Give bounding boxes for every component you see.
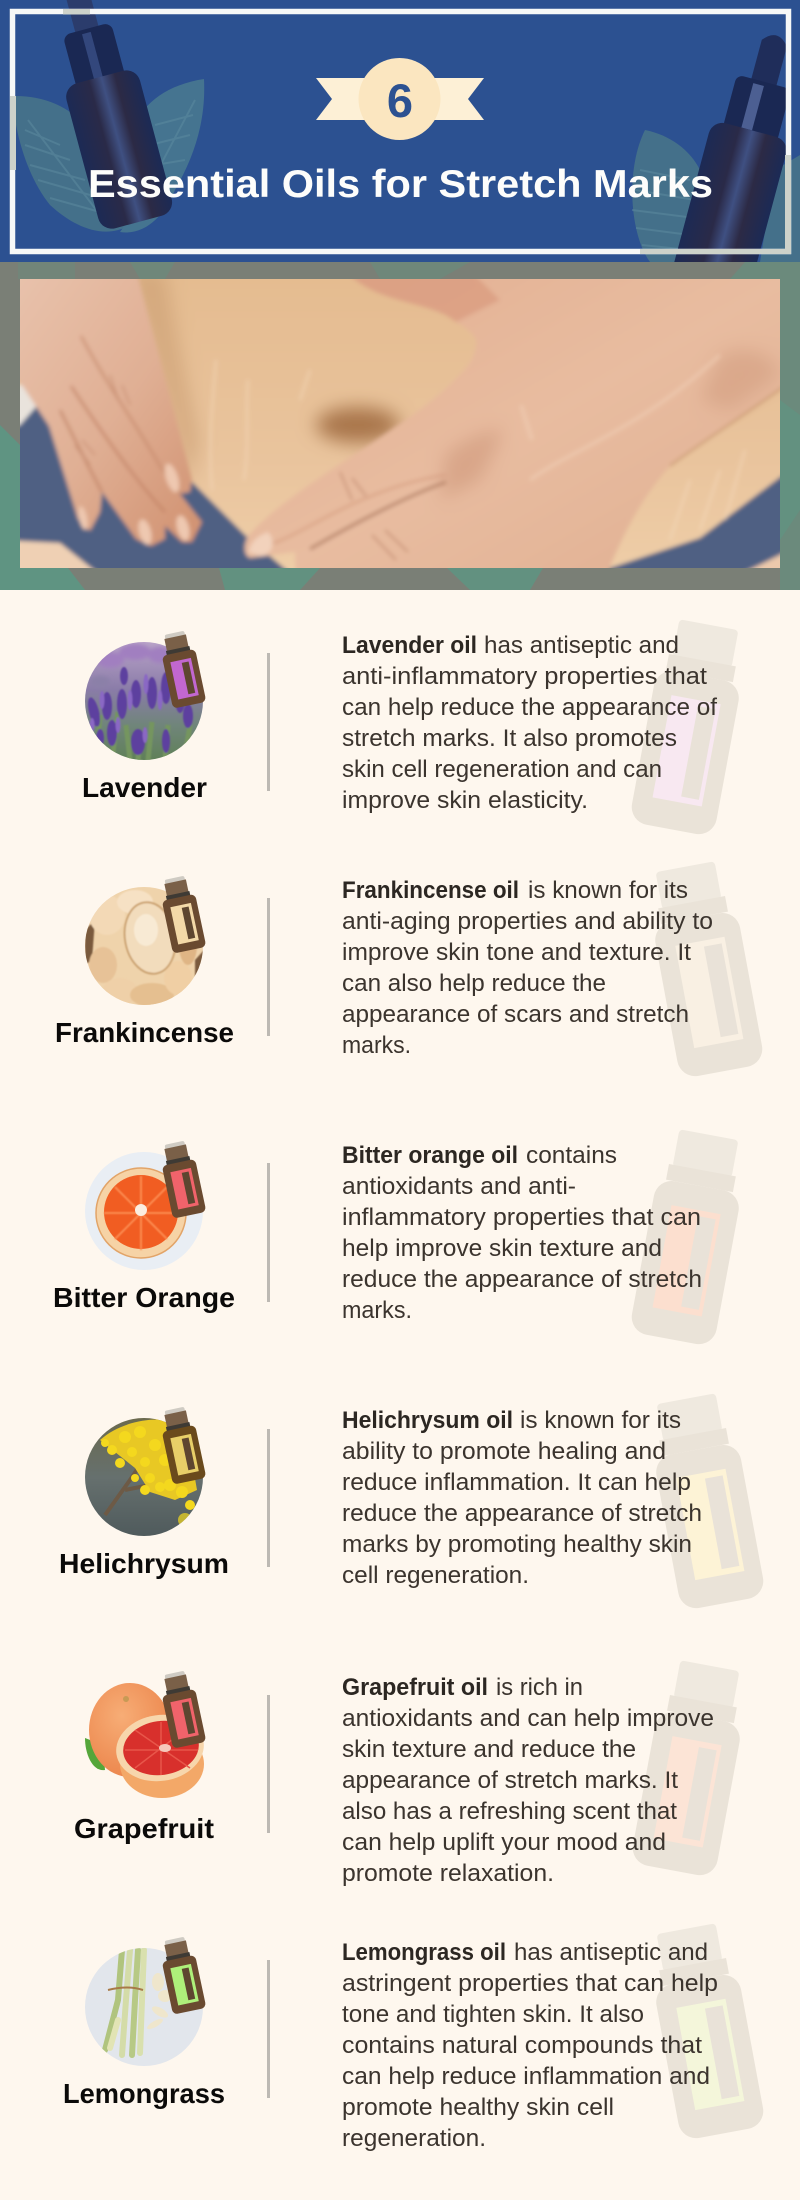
description: Lavender: anti-inflammatory properties that bbox=[342, 663, 707, 690]
leaf patches in the band bbox=[0, 262, 800, 590]
description: Frankincense: improve skin tone and texture. It bbox=[342, 939, 691, 966]
divider bbox=[267, 1695, 270, 1833]
watermark bottle: grapefruit bbox=[630, 1658, 752, 1878]
panel: blue header banner bbox=[0, 0, 800, 262]
watermark bottle: bitter orange bbox=[629, 1127, 751, 1347]
white patch beside left hand bbox=[20, 382, 38, 429]
divider bbox=[267, 1960, 270, 2098]
watermark bottle: lemongrass bbox=[644, 1921, 766, 2141]
description: Bitter Orange: help improve skin texture and bbox=[342, 1235, 662, 1262]
panel: photo band bbox=[0, 260, 800, 590]
description: Bitter Orange: inflammatory properties that can bbox=[342, 1204, 701, 1231]
description: Lavender: can help reduce the appearance of bbox=[342, 694, 717, 721]
description: Grapefruit: antioxidants and can help improve bbox=[342, 1705, 714, 1732]
label: Helichrysum: Helichrysum bbox=[59, 1548, 229, 1579]
description: Grapefruit: also has a refreshing scent that bbox=[342, 1798, 677, 1825]
skin bottom left bbox=[20, 537, 98, 568]
description: Frankincense: is known for its bbox=[528, 877, 688, 904]
description: Frankincense bbox=[342, 877, 713, 1059]
divider bbox=[267, 1429, 270, 1567]
watermark bottle: frankincense bbox=[643, 859, 765, 1079]
belly skin bbox=[20, 279, 780, 568]
navel shadow bbox=[316, 407, 400, 443]
label: Lavender: Lavender bbox=[82, 772, 207, 803]
description: Helichrysum: reduce inflammation. It can help bbox=[342, 1469, 691, 1496]
row: Grapefruit bbox=[74, 1658, 752, 1887]
description: Lavender: skin cell regeneration and can bbox=[342, 756, 662, 783]
description: Bitter Orange: reduce the appearance of stretch bbox=[342, 1266, 702, 1293]
description: Lemongrass: contains natural compounds that bbox=[342, 2032, 702, 2059]
thumb and knuckle tone bbox=[354, 279, 498, 322]
description: Grapefruit: skin texture and reduce the bbox=[342, 1736, 636, 1763]
left hand bbox=[20, 279, 205, 549]
divider bbox=[267, 1163, 270, 1302]
row: Lavender bbox=[82, 617, 751, 837]
description: Bitter Orange: marks. bbox=[342, 1297, 412, 1324]
row: Lemongrass bbox=[63, 1921, 766, 2152]
white frame bbox=[12, 12, 788, 252]
description: Grapefruit: can help uplift your mood and bbox=[342, 1829, 666, 1856]
description: Lemongrass: can help reduce inflammation and bbox=[342, 2063, 710, 2090]
icon: grapefruit oil bottle bbox=[158, 1669, 206, 1749]
description: Lavender: stretch marks. It also promotes bbox=[342, 725, 677, 752]
description: Frankincense: can also help reduce the bbox=[342, 970, 606, 997]
clothing left bbox=[20, 405, 288, 568]
description: Helichrysum bbox=[342, 1407, 702, 1589]
stretch marks bbox=[210, 362, 728, 520]
description: Grapefruit: Grapefruit oil bbox=[342, 1674, 488, 1701]
icon: lemongrass oil bottle bbox=[158, 1935, 206, 2015]
description: Grapefruit bbox=[342, 1674, 714, 1887]
photo: hands on stretch-marked belly bbox=[20, 279, 780, 568]
icon: left leaves bbox=[12, 79, 204, 232]
icon: right leaves bbox=[632, 130, 800, 262]
description: Helichrysum: reduce the appearance of stretch bbox=[342, 1500, 702, 1527]
description: Lemongrass: promote healthy skin cell bbox=[342, 2094, 614, 2121]
label: Bitter Orange: Bitter Orange bbox=[53, 1282, 235, 1313]
description: Lavender: improve skin elasticity. bbox=[342, 787, 588, 814]
description: Helichrysum: cell regeneration. bbox=[342, 1562, 529, 1589]
photo: helichrysum flowers bbox=[85, 1418, 204, 1537]
description: Lavender: Lavender oil bbox=[342, 632, 477, 659]
photo: lavender field bbox=[85, 642, 204, 761]
description: Helichrysum: marks by promoting healthy skin bbox=[342, 1531, 692, 1558]
row: Frankincense bbox=[55, 859, 765, 1079]
row: Helichrysum bbox=[59, 1391, 766, 1611]
label: Lemongrass: Lemongrass bbox=[63, 2078, 225, 2109]
icon: right dropper bottle bbox=[674, 35, 786, 262]
icon: frankincense oil bottle bbox=[158, 874, 206, 954]
description: Bitter Orange bbox=[342, 1142, 702, 1324]
tendons bbox=[521, 355, 720, 480]
description: Lemongrass bbox=[342, 1939, 718, 2152]
description: Helichrysum: is known for its bbox=[520, 1407, 681, 1434]
description: Bitter Orange: Bitter orange oil bbox=[342, 1142, 518, 1169]
description: Lemongrass: Lemongrass oil bbox=[342, 1939, 506, 1966]
icon: helichrysum oil bottle bbox=[158, 1405, 206, 1485]
shadow by left hand bbox=[140, 279, 202, 472]
description: Grapefruit: promote relaxation. bbox=[342, 1860, 554, 1887]
label: Grapefruit: Grapefruit bbox=[74, 1813, 214, 1844]
divider bbox=[267, 898, 270, 1036]
description: Lemongrass: has antiseptic and bbox=[514, 1939, 708, 1966]
description: Helichrysum: Helichrysum oil bbox=[342, 1407, 513, 1434]
description: Frankincense: appearance of scars and stretch bbox=[342, 1001, 689, 1028]
photo: lemongrass stalks bbox=[85, 1948, 204, 2067]
description: Bitter Orange: antioxidants and anti- bbox=[342, 1173, 576, 1200]
description: Lavender bbox=[342, 632, 717, 814]
photo: bitter orange slice bbox=[85, 1152, 203, 1270]
description: Grapefruit: is rich in bbox=[496, 1674, 583, 1701]
watermark bottle: lavender bbox=[629, 617, 751, 837]
ribbon badge with number 6: 6 bbox=[387, 74, 413, 127]
description: Helichrysum: ability to promote healing and bbox=[342, 1438, 666, 1465]
title: Essential Oils for Stretch Marks bbox=[88, 163, 713, 206]
divider bbox=[267, 653, 270, 791]
clothing right bbox=[607, 474, 780, 568]
photo: grapefruit bbox=[85, 1683, 208, 1798]
description: Frankincense: marks. bbox=[342, 1032, 411, 1059]
description: Lemongrass: regeneration. bbox=[342, 2125, 486, 2152]
description: Frankincense: anti-aging properties and ability to bbox=[342, 908, 713, 935]
row: Bitter Orange bbox=[53, 1127, 751, 1347]
icon: lavender oil bottle bbox=[158, 629, 206, 709]
description: Grapefruit: appearance of stretch marks. It bbox=[342, 1767, 678, 1794]
skin bottom right bbox=[745, 550, 780, 568]
icon: bitter orange oil bottle bbox=[158, 1139, 206, 1219]
description: Lemongrass: astringent properties that can help bbox=[342, 1970, 718, 1997]
description: Lemongrass: tone and tighten skin. It also bbox=[342, 2001, 644, 2028]
description: Lavender: has antiseptic and bbox=[484, 632, 679, 659]
right hand bbox=[241, 279, 780, 568]
ribbon badge with number 6 bbox=[316, 58, 484, 140]
description: Bitter Orange: contains bbox=[526, 1142, 617, 1169]
photo: frankincense resin bbox=[85, 887, 204, 1007]
watermark bottle: helichrysum bbox=[644, 1391, 766, 1611]
description: Frankincense: Frankincense oil bbox=[342, 877, 519, 904]
icon: left dropper bottle bbox=[64, 0, 172, 229]
label: Frankincense: Frankincense bbox=[55, 1017, 234, 1048]
